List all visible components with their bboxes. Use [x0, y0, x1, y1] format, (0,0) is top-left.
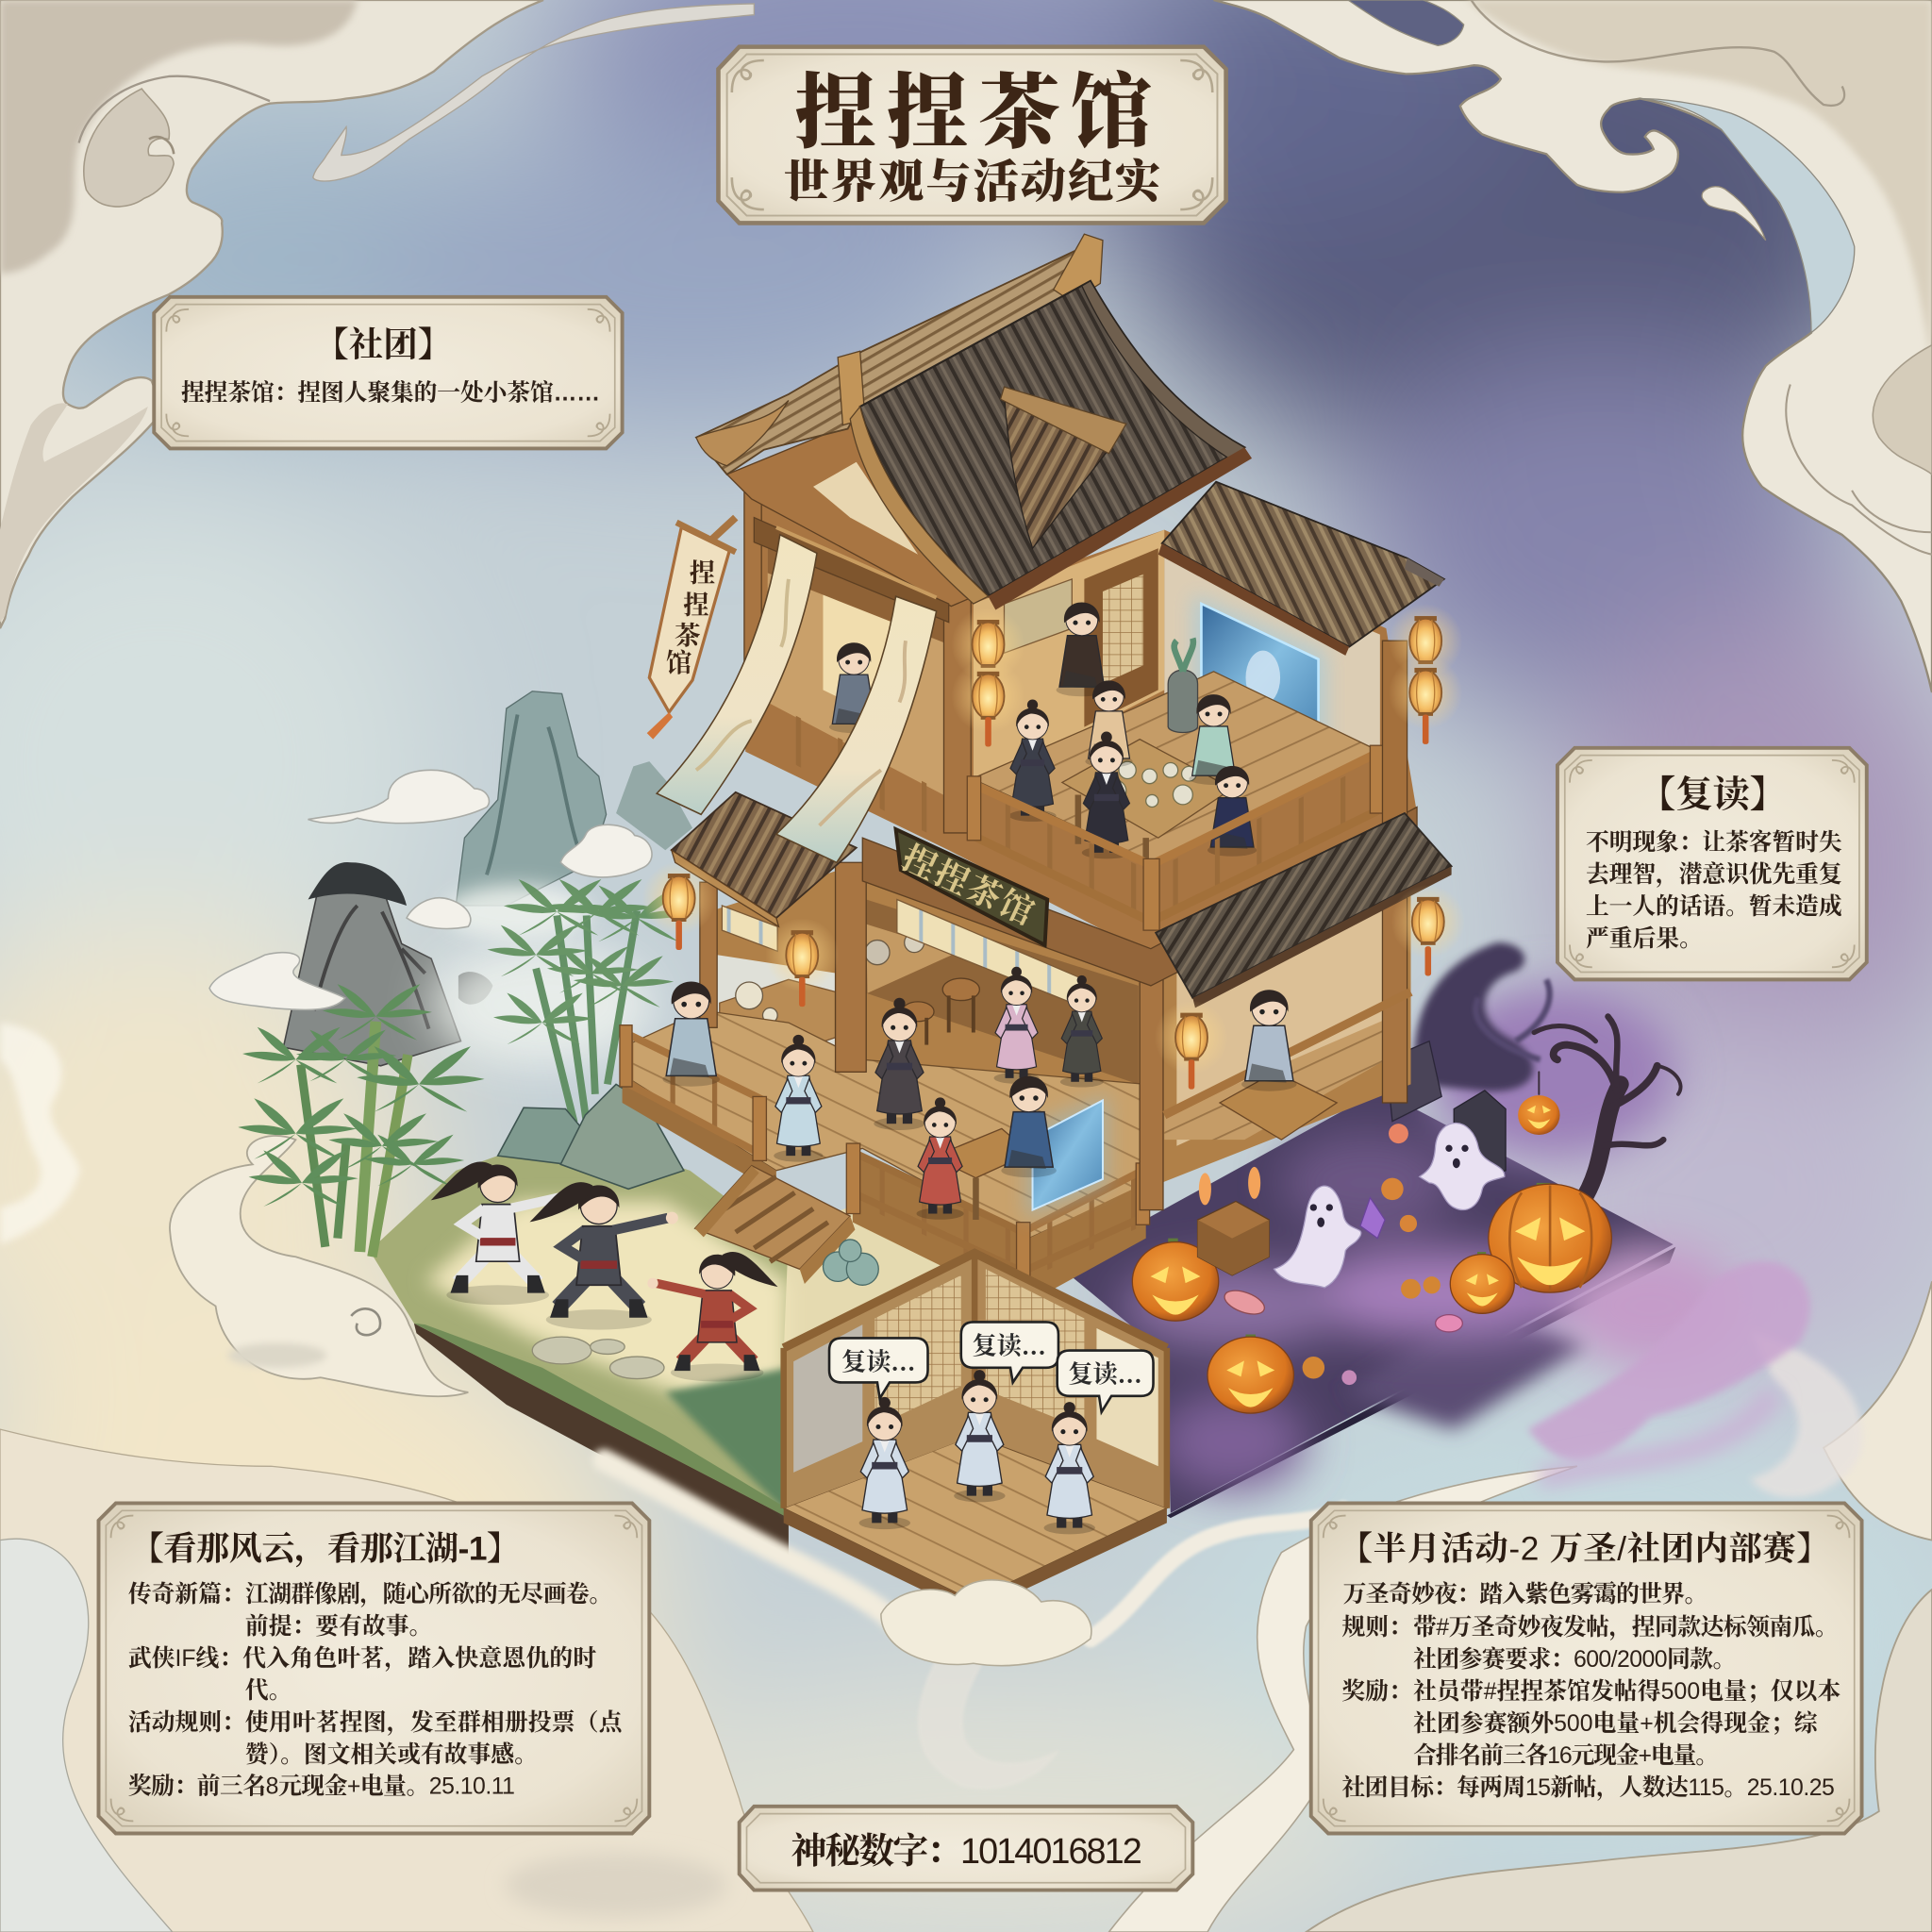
- mountain: far teal peak: [456, 691, 607, 906]
- repeat text: [1586, 828, 1842, 952]
- subtitle text: 世界观与活动纪实: [784, 144, 1163, 210]
- island ground: grass and path: [370, 1146, 986, 1555]
- panel: secret number: [740, 1807, 1192, 1890]
- light back roof strip: [696, 246, 1091, 475]
- mountains: [283, 691, 692, 1066]
- hanging vertical banner: 捏: [690, 551, 715, 589]
- beam band under balcony: [862, 808, 1417, 986]
- speech bubble 3: [1058, 1351, 1154, 1412]
- deck skirt under front railing: [853, 1148, 1146, 1306]
- stone tombs: [1386, 1041, 1441, 1122]
- icon: bare tree with hanging pumpkin: [1534, 1017, 1681, 1205]
- teal ornamental rock: [823, 1240, 878, 1285]
- icon: candle box: [1198, 1167, 1269, 1275]
- panel: jianghu event: [98, 1503, 649, 1834]
- title panel: [718, 47, 1226, 223]
- awning under sign: [897, 899, 1084, 1008]
- right outer pillar: [1382, 641, 1407, 825]
- bamboo: front grove: [238, 984, 485, 1257]
- jianghu text: 代入角色叶茗，踏入快意恩仇的时: [242, 1644, 596, 1673]
- ground floor table: [933, 1128, 1030, 1178]
- cloud frame: top-right swirl: [1214, 0, 1932, 692]
- panel: repeat: [1557, 748, 1867, 979]
- halloween text: 规则：: [1341, 1614, 1412, 1641]
- booth left wall: [784, 1253, 974, 1508]
- big cloud at island corner: [170, 1136, 468, 1396]
- icon: left pumpkin: [1132, 1239, 1219, 1321]
- repeat text: 去理智，潜意识优先重复: [1586, 860, 1842, 889]
- cloud frame: top-left swirl: [0, 0, 754, 628]
- jianghu text: 奖励：前三名8元现金+电量。25.10.11: [128, 1773, 515, 1800]
- hanging vertical banner: 捏: [683, 583, 709, 621]
- speech bubble 1: [829, 1338, 928, 1398]
- title text: 捏捏茶馆: [794, 47, 1152, 164]
- bamboo groves: [238, 879, 693, 1257]
- upper floor structure: [745, 419, 1417, 955]
- balcony floor: [973, 672, 1377, 861]
- dormer: [1001, 387, 1126, 548]
- seated elder, left room: [829, 642, 878, 733]
- secret number text: 神秘数字：1014016812: [791, 1832, 1142, 1872]
- booth character right: [1044, 1402, 1095, 1534]
- teahouse building: [620, 234, 1465, 1306]
- panel: halloween event: [1311, 1503, 1862, 1834]
- repeat text: 严重后果。: [1586, 925, 1703, 952]
- front railing: [846, 1143, 1150, 1281]
- Halloween island section: [1059, 942, 1810, 1518]
- mountain: grey ink peak: [283, 868, 460, 1066]
- icon: purple star spirit: [1360, 1198, 1385, 1239]
- icon: large pumpkin: [1489, 1183, 1611, 1292]
- halloween text: 带#万圣奇妙夜发帖，捏同款达标领南瓜。: [1412, 1614, 1839, 1641]
- potted plant: [1168, 639, 1198, 732]
- jianghu text: 前提：要有故事。: [245, 1613, 432, 1640]
- jianghu text: 传奇新篇：: [128, 1581, 245, 1607]
- awning under left roof: [722, 906, 777, 951]
- halloween text: 社团目标：每两周15新帖，人数达115。25.10.25: [1341, 1774, 1835, 1802]
- ground floor deck: [623, 1010, 1146, 1239]
- halloween text: [1341, 1580, 1841, 1802]
- halloween text: 万圣奇妙夜：踏入紫色雾霭的世界。: [1343, 1580, 1707, 1607]
- hanging vertical banner: 馆: [666, 641, 691, 679]
- left railing: [620, 1025, 766, 1160]
- balcony table: [1062, 740, 1232, 869]
- booth right wall: [974, 1253, 1167, 1508]
- icon: medium pumpkin: [1450, 1252, 1514, 1313]
- lower right roof: [1156, 813, 1452, 1008]
- purple fog scrolls: [1528, 1261, 1810, 1460]
- ground floor characters: [662, 967, 1297, 1220]
- stairs: [695, 1166, 855, 1284]
- hanging vertical banner: [647, 518, 736, 740]
- flowing scroll banner right: [776, 596, 937, 862]
- thin wisp from the top edge: [313, 4, 754, 181]
- ground floor pillars: [700, 862, 1407, 1210]
- balcony characters: [1008, 680, 1257, 858]
- halloween heading: 【半月活动-2 万圣/社团内部赛】: [1340, 1531, 1830, 1568]
- lanterns: [641, 604, 1465, 1090]
- ridge post and finial: [838, 234, 1103, 425]
- upper seated character: [1057, 602, 1108, 696]
- jianghu text: 活动规则：: [128, 1709, 245, 1736]
- speech bubble 3: 复读...: [1068, 1355, 1142, 1390]
- booth character left: [859, 1397, 910, 1529]
- right room railing: [1164, 991, 1411, 1115]
- rocks behind the deck: [498, 1084, 684, 1189]
- repeat text: 不明现象：让茶客暂时失: [1586, 828, 1842, 856]
- speech bubble 1: 复读...: [841, 1342, 915, 1377]
- repeat text: 上一人的话语。暂未造成: [1586, 893, 1842, 920]
- right room walls: [974, 530, 1164, 789]
- bamboo: back grove: [487, 879, 693, 1123]
- hanging vertical banner: 茶: [675, 614, 701, 652]
- halloween text: 奖励：: [1341, 1677, 1412, 1705]
- icon: left ghost: [1274, 1186, 1361, 1288]
- lower left roof: [672, 792, 857, 918]
- jianghu text: 武侠IF线：: [128, 1644, 242, 1672]
- panel: club: [154, 297, 623, 448]
- shop signboard: 捏捏茶馆: [895, 832, 1045, 936]
- booth character centre: [954, 1370, 1006, 1502]
- repeat heading: 【复读】: [1639, 775, 1787, 816]
- stepping stones: [532, 1337, 664, 1379]
- flowing scroll banner left: [657, 535, 817, 814]
- booth floor: [784, 1436, 1167, 1601]
- club text: 捏捏茶馆：捏图人聚集的一处小茶馆……: [181, 379, 600, 406]
- jianghu text: 使用叶茗捏图，发至群相册投票（点: [245, 1708, 625, 1737]
- shelf with teaware: [720, 924, 958, 1054]
- ground floor rear wall: [708, 862, 1411, 1189]
- holographic screen, lower: [1025, 1094, 1109, 1220]
- repeat room booth: [784, 1253, 1167, 1614]
- icon: front pumpkin: [1208, 1335, 1293, 1413]
- main dark roof: [860, 281, 1244, 596]
- halloween text: 社团参赛要求：600/2000同款。: [1413, 1646, 1736, 1673]
- icon: candies: [1222, 1124, 1462, 1385]
- jianghu heading: 【看那风云，看那江湖-1】: [130, 1531, 520, 1569]
- icon: right ghost: [1420, 1124, 1505, 1209]
- holographic screen, upper: [1192, 594, 1327, 754]
- left pillars: [744, 491, 971, 833]
- speech bubble 2: [961, 1322, 1058, 1382]
- halloween text: 社员带#捏捏茶馆发帖得500电量；仅以本: [1413, 1678, 1841, 1705]
- mountain: far small peak: [616, 761, 692, 850]
- fighters in the courtyard: [431, 1161, 778, 1381]
- right side roof: [1158, 482, 1444, 656]
- jianghu text: [128, 1581, 625, 1800]
- dark smoke: [1415, 942, 1550, 1091]
- mountain: dark pine top: [308, 862, 407, 906]
- balcony railing: [967, 745, 1385, 930]
- jianghu text: 代。: [245, 1677, 292, 1704]
- stools: [902, 978, 979, 1045]
- speech bubble 2: 复读...: [972, 1326, 1046, 1361]
- cloud frame: bottom swirls: [0, 1023, 1932, 1932]
- halloween text: 合排名前三各16元现金+电量。: [1413, 1742, 1719, 1769]
- left room interior: [768, 542, 955, 801]
- jianghu text: 江湖群像剧，随心所欲的无尽画卷。: [245, 1581, 612, 1608]
- bottom cloud under island: [604, 1460, 1343, 1666]
- gable and upper left beam: [727, 419, 986, 607]
- halloween text: 社团参赛额外500电量+机会得现金；综: [1413, 1710, 1820, 1737]
- jianghu text: 赞）。图文相关或有故事感。: [245, 1740, 538, 1768]
- clouds behind the island: [209, 770, 652, 1009]
- icon: tree pumpkin: [1518, 1095, 1560, 1135]
- club heading: 【社团】: [314, 325, 452, 363]
